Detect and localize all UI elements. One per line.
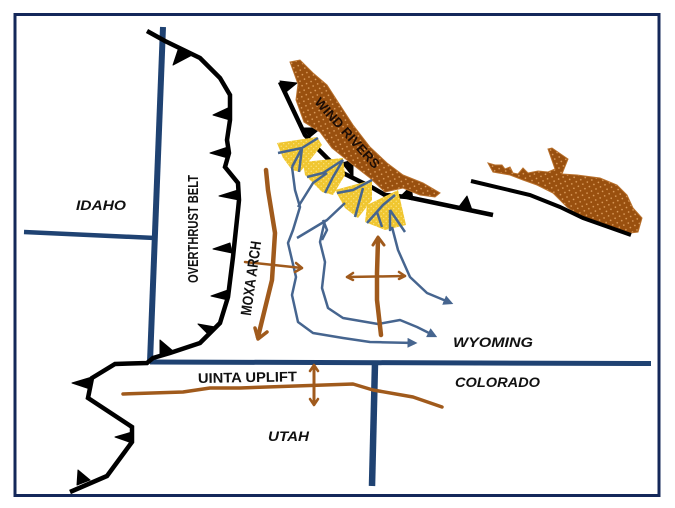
river B: [320, 220, 435, 336]
label: Wyoming: WYOMING: [453, 335, 534, 350]
fault teeth: [280, 81, 472, 210]
label: Utah: UTAH: [268, 429, 309, 444]
overthrust belt fault: [70, 31, 239, 492]
boundary: Idaho / Utah: [24, 232, 155, 238]
label: Moxa Arch: MOXA ARCH: [238, 240, 265, 317]
horizontal arrow: [347, 276, 405, 277]
label: Idaho: IDAHO: [76, 198, 127, 213]
river C: [392, 227, 451, 303]
label: Colorado: COLORADO: [455, 375, 541, 390]
boundary: Idaho / Wyoming: [150, 27, 163, 362]
Wind Rivers range: [290, 60, 440, 197]
vertical axis arrow: [377, 240, 381, 335]
vertical arrow: [312, 366, 316, 404]
Wind River thrust fault: [280, 81, 493, 215]
Uinta Uplift axis: [123, 365, 442, 407]
river A: [288, 167, 415, 343]
eastern thrust fault: [471, 181, 631, 235]
label: Wind Rivers: WIND RIVERS: [312, 95, 383, 172]
cross arrow: [245, 262, 302, 268]
axis line: [123, 384, 442, 407]
fault teeth: [72, 50, 239, 485]
boundary: Wyoming / Colorado: [150, 362, 651, 364]
axis arrow: [258, 170, 275, 337]
fault line: [280, 82, 493, 215]
label: Uinta Uplift: UINTA UPLIFT: [198, 368, 297, 386]
boundary: Utah / Colorado: [372, 363, 375, 486]
Moxa Arch axis: [245, 170, 302, 339]
rivers: [278, 138, 451, 343]
fault line: [70, 31, 239, 492]
label: Overthrust Belt: OVERTHRUST BELT: [185, 175, 202, 283]
eastern range: [488, 148, 642, 233]
cross arch symbol: [347, 237, 405, 335]
alluvial fans: [277, 137, 406, 230]
tributaries: [278, 138, 405, 240]
